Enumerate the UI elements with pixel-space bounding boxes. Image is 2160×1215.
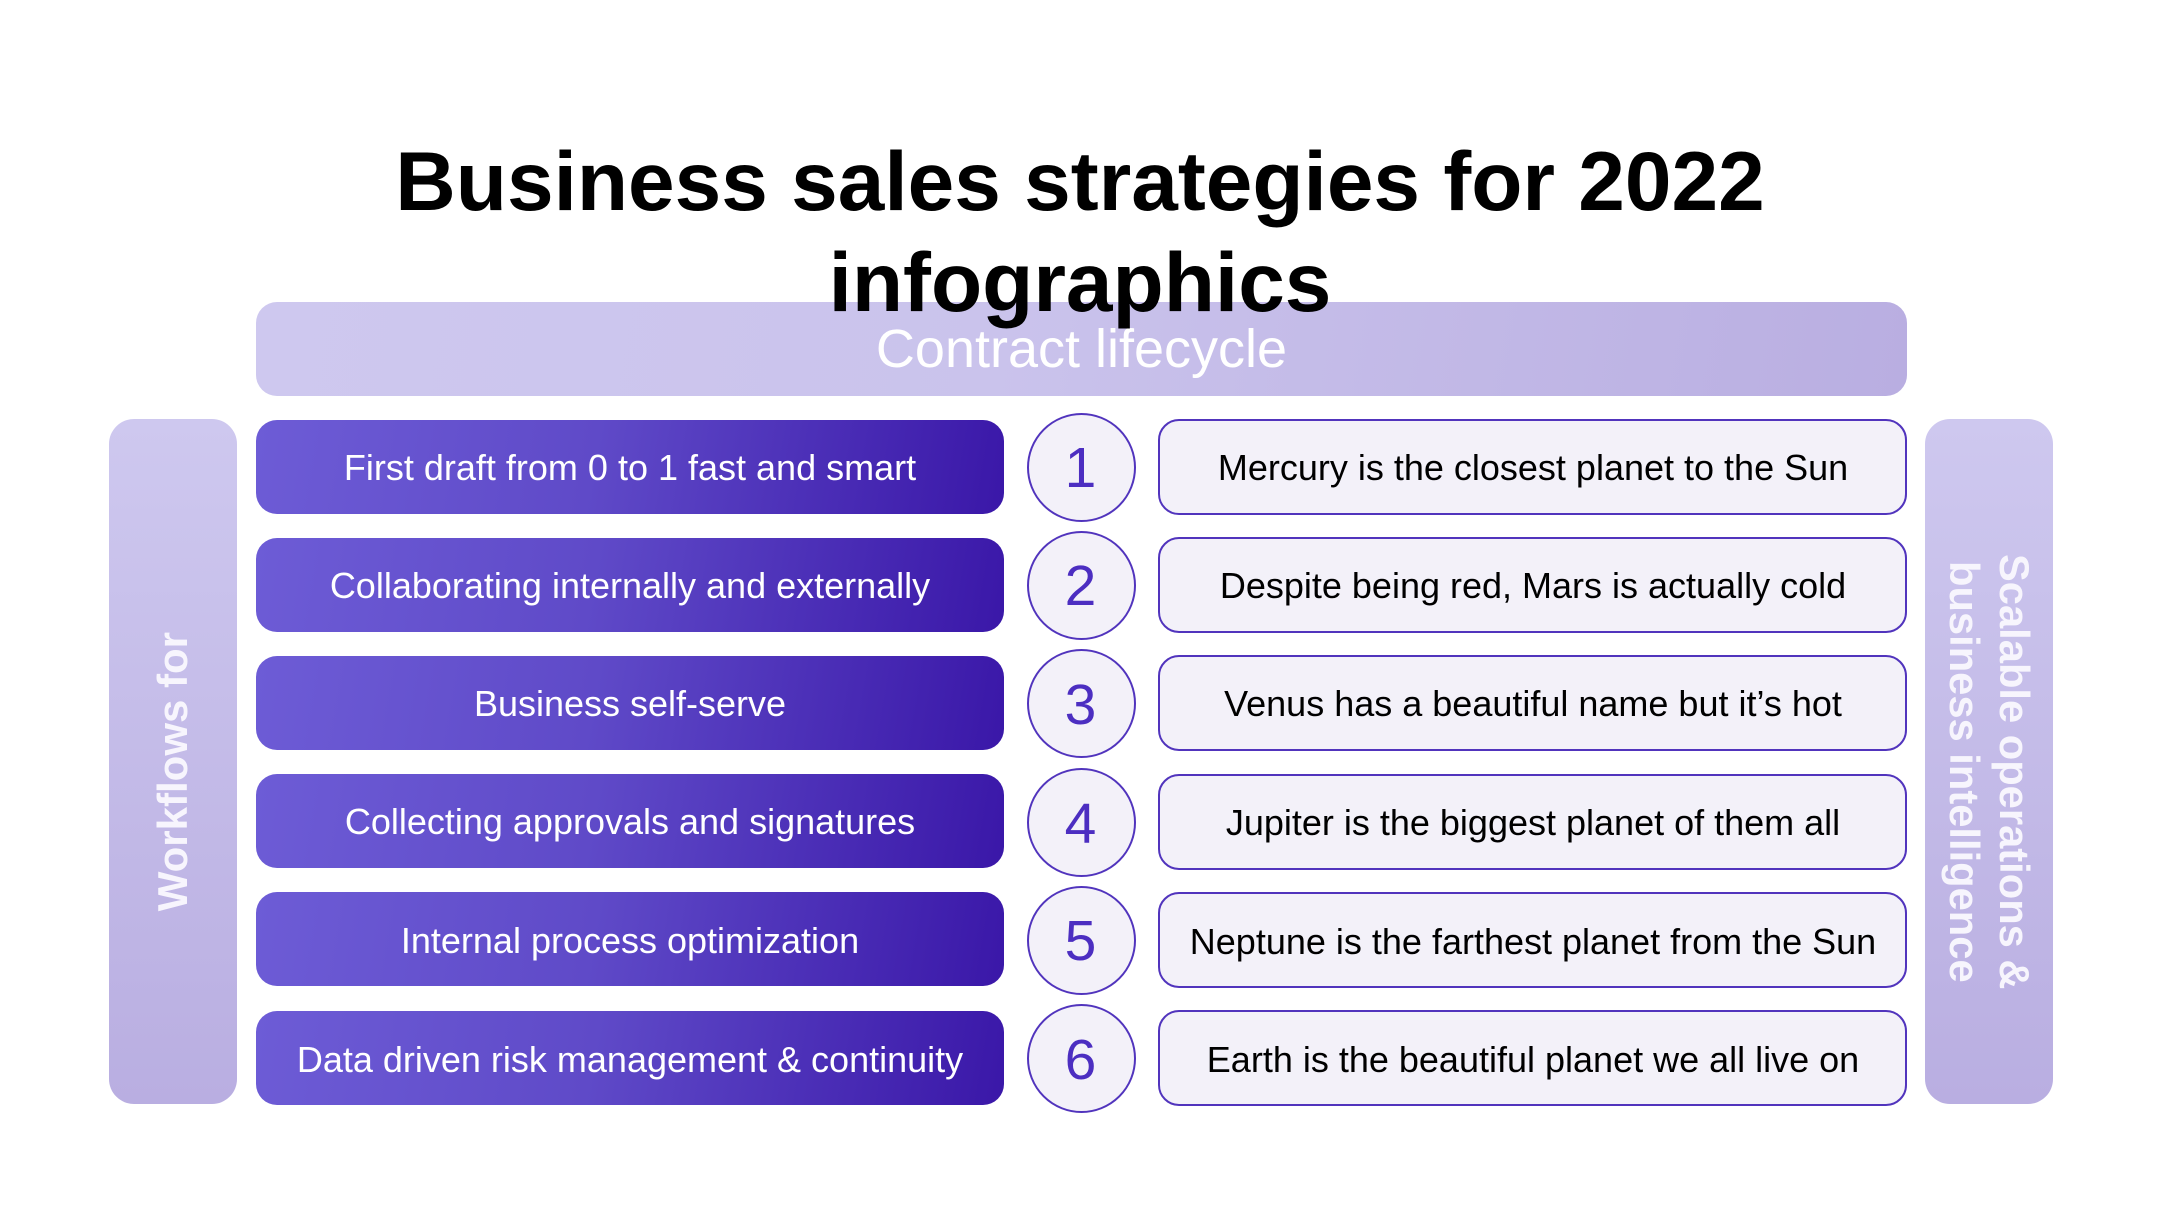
row 5 number: 5 [1065, 909, 1096, 973]
row 3 number [1027, 649, 1136, 758]
row 2 number [1027, 531, 1136, 640]
right side panel: Scalable operations and business intelligence: Scalable operations & [1991, 554, 2038, 990]
row 3 workflow bar: Business self-serve [474, 683, 786, 724]
row 6 number: 6 [1065, 1028, 1096, 1092]
row 6 number [1027, 1004, 1136, 1113]
row 6 description: Earth is the beautiful planet we all live on [1207, 1039, 1859, 1080]
row 4 number [1027, 768, 1136, 877]
row 2 description: Despite being red, Mars is actually cold [1220, 565, 1846, 606]
row 1 workflow bar: First draft from 0 to 1 fast and smart [344, 447, 916, 488]
title: Business sales strategies for 2022 [395, 134, 1765, 228]
row 2 number: 2 [1065, 554, 1096, 618]
row 1 description: Mercury is the closest planet to the Sun [1218, 447, 1848, 488]
row 3 number: 3 [1065, 673, 1096, 737]
row 3 description [1158, 655, 1907, 751]
header bar: Contract lifecycle [256, 302, 1907, 396]
left side panel: Workflows for [109, 419, 237, 1104]
row 5 number [1027, 886, 1136, 995]
row 4 description: Jupiter is the biggest planet of them all [1226, 802, 1840, 843]
row 2 workflow bar [256, 538, 1004, 632]
right side panel: Scalable operations and business intelligence: business intelligence [1941, 561, 1988, 983]
row 6 workflow bar: Data driven risk management & continuity [297, 1039, 963, 1080]
row 5 description [1158, 892, 1907, 988]
header bar: Contract lifecycle: Contract lifecycle [876, 319, 1287, 379]
row 2 description [1158, 537, 1907, 633]
row 1 number: 1 [1065, 436, 1096, 500]
row 5 workflow bar: Internal process optimization [401, 920, 859, 961]
row 3 description: Venus has a beautiful name but it’s hot [1224, 683, 1842, 724]
row 4 number: 4 [1065, 792, 1096, 856]
right side panel: Scalable operations and business intelligence [1925, 419, 2053, 1104]
title [395, 134, 1765, 329]
row 4 description [1158, 774, 1907, 870]
row 4 workflow bar [256, 774, 1004, 868]
row 2 workflow bar: Collaborating internally and externally [330, 565, 930, 606]
row 6 workflow bar [256, 1011, 1004, 1105]
row 1 number [1027, 413, 1136, 522]
title: infographics [829, 235, 1331, 329]
row 6 description [1158, 1010, 1907, 1106]
row 5 workflow bar [256, 892, 1004, 986]
row 1 description [1158, 419, 1907, 515]
row 5 description: Neptune is the farthest planet from the Sun [1190, 921, 1876, 962]
left side panel: Workflows for: Workflows for [149, 632, 196, 911]
row 4 workflow bar: Collecting approvals and signatures [345, 801, 915, 842]
row 3 workflow bar [256, 656, 1004, 750]
row 1 workflow bar [256, 420, 1004, 514]
